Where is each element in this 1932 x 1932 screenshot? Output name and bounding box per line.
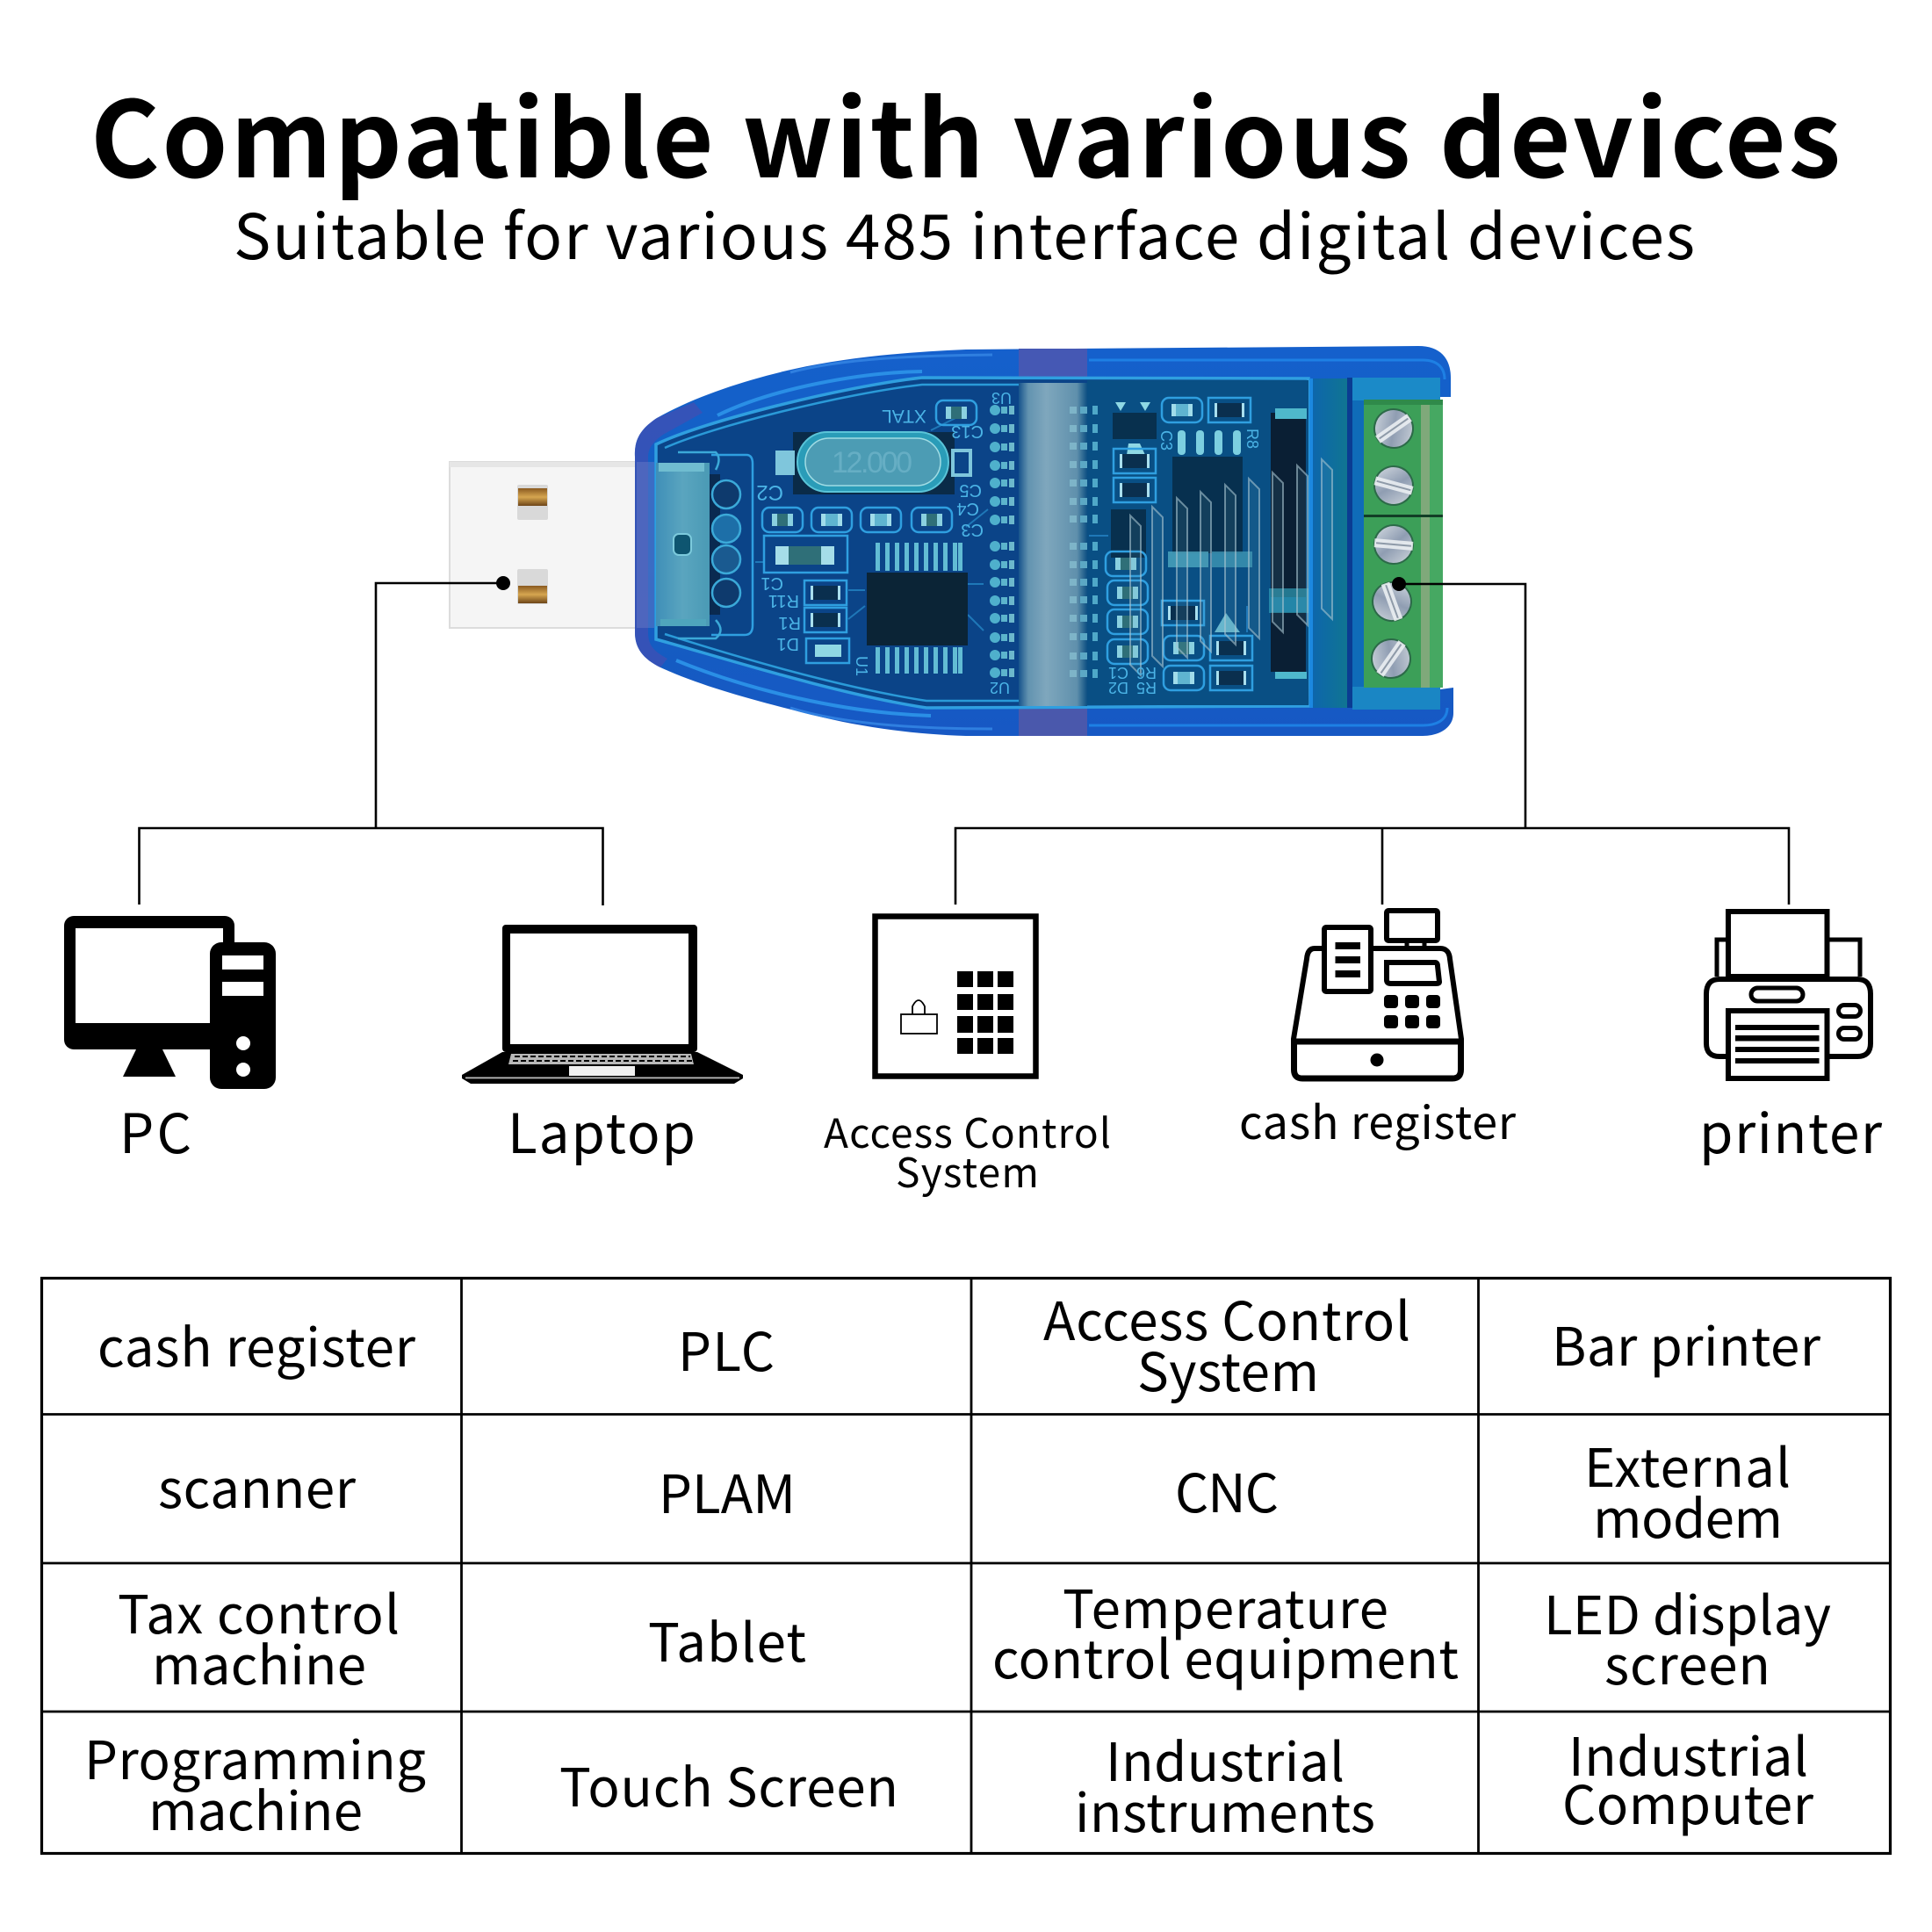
right pin header pads [1070,406,1098,678]
silkscreen markings: C5 [959,480,982,500]
silkscreen markings: U1 [853,656,870,676]
reflections of the housing ridges [1130,459,1332,675]
silkscreen markings: C4 [956,499,979,518]
cell: Industrial Computer: Computer [1562,1763,1814,1840]
cell: Industrial instruments [1075,1720,1375,1848]
silkscreen markings: R6 [1136,664,1157,681]
main chip [867,543,968,674]
silkscreen markings: C3 [1157,430,1175,451]
cell: Access Control System: Access Control [1043,1280,1410,1356]
cell: Industrial Computer: Industrial [1568,1715,1808,1791]
cell: External modem: modem [1593,1477,1783,1554]
capacitors row [762,400,977,663]
label: Access Control [824,1102,1111,1160]
cell: Tax control machine: Tax control [118,1573,400,1649]
label: printer [1699,1090,1883,1169]
cell: Tablet: Tablet [648,1601,806,1677]
cell: Access Control System: System [1137,1330,1319,1407]
cell: Temperature control equipment [992,1568,1459,1694]
pointer dot: USB plug [496,576,510,590]
cell: Industrial instruments: instruments [1075,1771,1375,1848]
device: PC [64,916,276,1169]
icon: printer [1706,912,1871,1078]
green screw terminal [1364,400,1443,688]
translucent blue case [635,346,1453,736]
silkscreen markings: D2 [1108,679,1128,696]
USB connector block [656,452,753,638]
silkscreen markings: XTAL [882,406,926,426]
cell: scanner: scanner [158,1447,357,1524]
subtitle: Suitable for various 485 interface digital devices [234,188,1695,278]
silkscreen markings: R8 [1244,429,1261,449]
circuit board [656,378,1440,710]
icon: laptop [462,925,743,1084]
device: access control system [824,917,1111,1200]
crystal: 12.000 [832,446,912,479]
silkscreen markings: R5 [1136,679,1157,696]
cell: Bar printer: Bar printer [1552,1305,1821,1381]
title: Compatible with various devices [90,55,1841,208]
device: laptop [462,925,743,1169]
connector line: terminal side to peripherals [955,584,1789,905]
device: cash register [1239,911,1517,1152]
cell: Industrial instruments: Industrial [1106,1720,1344,1797]
label: Laptop [508,1090,696,1169]
silkscreen markings: U2 [990,679,1010,696]
silkscreen markings: C1 [1108,664,1128,681]
crystal [775,432,970,494]
cell: External modem: External [1584,1426,1791,1503]
cell: LED display screen: screen [1604,1624,1770,1700]
cell: Tax control machine [118,1573,400,1700]
silkscreen markings [756,389,1261,696]
device: printer [1699,912,1883,1169]
cell: Temperature control equipment: Temperature [1063,1568,1388,1644]
cell: External modem [1584,1426,1791,1554]
label: cash register [1239,1086,1517,1152]
silkscreen markings: C13 [951,422,984,441]
silkscreen markings: D1 [776,634,799,653]
product photo: USB to RS485 converter [450,346,1453,736]
cell: LED display screen: LED display [1544,1574,1831,1650]
cell: Access Control System [1043,1280,1410,1407]
cell: Temperature control equipment: control equipment [992,1618,1459,1694]
silkscreen markings: R11 [768,591,799,610]
board traces [755,413,1247,632]
silkscreen markings: C1 [761,573,783,593]
silkscreen markings: C3 [961,520,984,539]
right board components [1106,398,1308,690]
cell: LED display screen [1544,1574,1831,1700]
cell: PLC: PLC [678,1310,775,1387]
table grid [41,1278,1891,1854]
icon: access control panel [875,917,1036,1077]
compatibility table [41,1278,1891,1854]
cell: CNC: CNC [1175,1452,1279,1528]
label [824,1102,1111,1200]
silkscreen markings: R1 [778,613,801,632]
label: PC [119,1090,191,1169]
left pin header pads [990,405,1014,678]
silkscreen markings: U3 [991,389,1012,407]
cell: Touch Screen: Touch Screen [559,1746,898,1822]
pointer dot: terminal block [1392,577,1406,591]
cell: Industrial Computer [1562,1715,1814,1840]
cell: Tax control machine: machine [152,1624,366,1700]
cell: cash register: cash register [97,1306,416,1382]
cell: Programming machine: Programming [84,1719,426,1795]
cell: Programming machine [84,1719,426,1846]
icon: desktop computer [64,916,276,1089]
cell: Programming machine: machine [148,1770,363,1846]
connector line: USB side to PC and laptop [139,583,602,905]
label: System [896,1142,1039,1200]
silkscreen markings: C2 [756,480,783,504]
USB plug [450,462,638,628]
icon: cash register [1294,911,1461,1078]
cell: PLAM: PLAM [659,1453,796,1529]
